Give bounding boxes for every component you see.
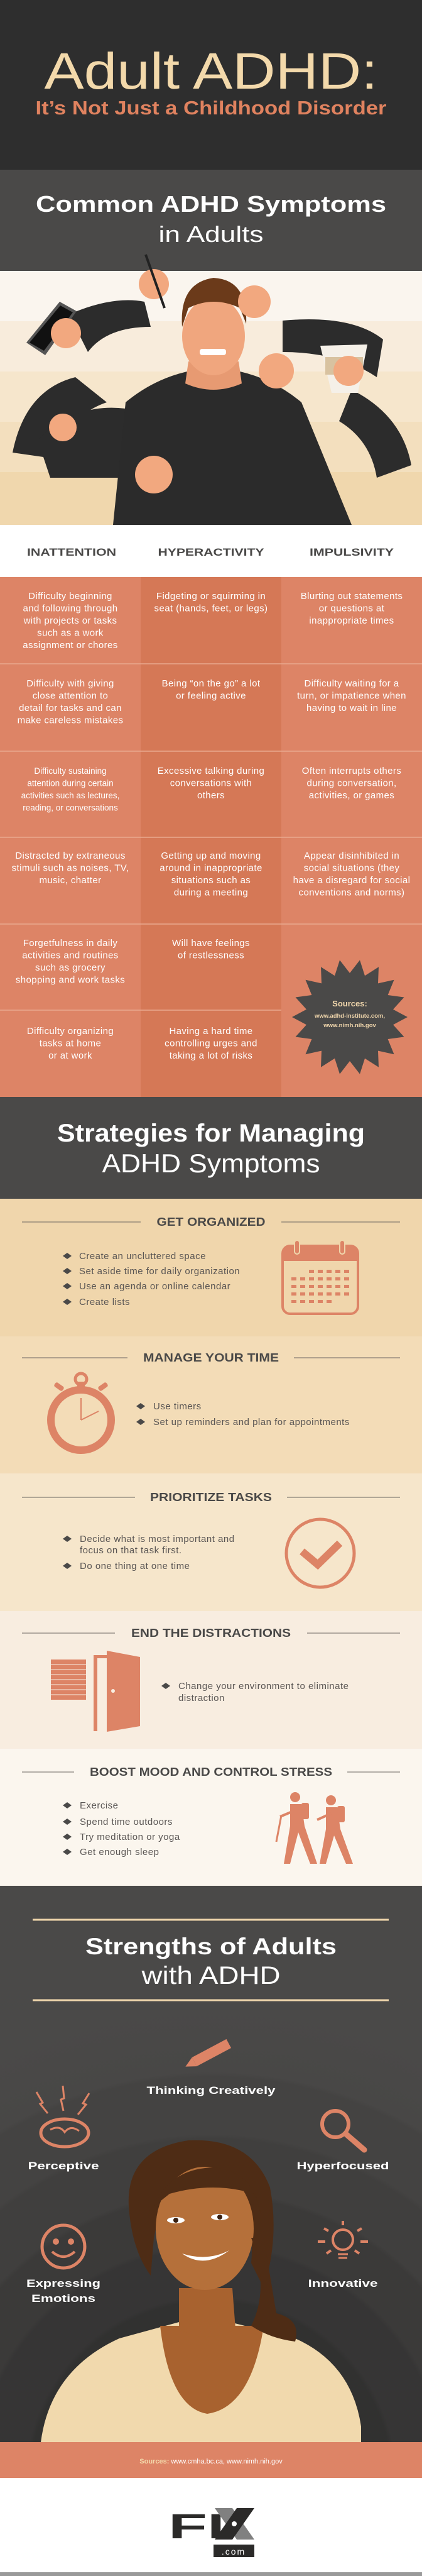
heading: strengths: Strengths of Adults <box>85 1934 337 1959</box>
panel: end the distractions <box>0 1611 422 1749</box>
panel: strengths of adults with ADHD <box>0 1886 422 2442</box>
panel: end the distractions: distraction <box>178 1693 225 1704</box>
symptoms table: social situations (they <box>304 862 399 874</box>
symptoms table: Excessive talking during <box>158 766 264 776</box>
hands <box>139 269 169 299</box>
row 5: such as grocery <box>35 962 106 973</box>
strength: thinking creatively <box>147 2039 276 2096</box>
row 1: Difficulty beginning <box>28 591 112 602</box>
symptoms table: Having a hard time <box>169 1026 253 1037</box>
symptoms table: seat (hands, feet, or legs) <box>154 603 268 614</box>
column headers: INATTENTION <box>27 546 116 558</box>
icon: open door <box>94 1651 140 1732</box>
sources starburst: www.nimh.nih.gov <box>323 1022 376 1029</box>
panel: prioritize tasks: Do one thing at one time <box>80 1561 190 1571</box>
panel: strengths of adults with ADHD: with ADHD <box>141 1962 280 1990</box>
heading: Common ADHD Symptoms in Adults <box>0 170 422 271</box>
row 3: reading, or conversations <box>23 803 118 812</box>
heading: Strategies for Managing ADHD Symptoms: ADHD Symptoms <box>102 1148 320 1178</box>
panel: boost mood and control stress: Get enough sleep <box>80 1847 159 1858</box>
symptoms table: Fidgeting or squirming in <box>156 591 266 602</box>
symptoms table: conventions and norms) <box>299 888 404 898</box>
strength: thinking creatively: Thinking Creatively <box>147 2084 276 2096</box>
heading: Strategies for Managing ADHD Symptoms <box>0 1097 422 1199</box>
row 3: activities such as lectures, <box>21 791 119 800</box>
symptoms table: Appear disinhibited in <box>304 850 399 861</box>
panel: boost mood and control stress: Exercise <box>80 1800 119 1811</box>
row 4: Distracted by extraneous <box>15 850 126 861</box>
icon: hikers <box>276 1792 353 1864</box>
symptoms table: having to wait in line <box>306 703 397 713</box>
symptoms table: Difficulty waiting for a <box>304 678 399 689</box>
title panel <box>0 0 422 170</box>
sources bar <box>0 2442 422 2478</box>
head <box>182 297 245 375</box>
panel: prioritize tasks: PRIORITIZE TASKS <box>150 1491 272 1504</box>
symptoms table: Will have feelings <box>172 938 250 949</box>
illustration: stressed man with many arms <box>0 255 422 525</box>
icon: window blinds <box>51 1660 86 1700</box>
row 5: shopping and work tasks <box>16 974 125 986</box>
heading: Common ADHD Symptoms in Adults: Common ADHD Symptoms <box>36 191 386 217</box>
symptoms table: during a meeting <box>174 888 248 898</box>
symptoms table: inappropriate times <box>309 615 394 626</box>
symptoms table: taking a lot of risks <box>170 1050 252 1061</box>
symptoms table: situations such as <box>171 875 251 886</box>
row 4: music, chatter <box>40 875 101 886</box>
panel: manage your time: Use timers <box>153 1401 202 1412</box>
row 2: Difficulty with giving <box>26 678 114 689</box>
panel: boost mood and control stress: BOOST MOOD AND CONTROL STRESS <box>90 1766 332 1778</box>
row 4: stimuli such as noises, TV, <box>12 862 129 874</box>
symptoms table: of restlessness <box>178 950 244 960</box>
panel: get organized <box>0 1199 422 1336</box>
strength: expressing emotions: Emotions <box>31 2293 95 2304</box>
symptoms table: during conversation, <box>306 778 397 788</box>
panel: prioritize tasks: focus on that task first. <box>80 1545 182 1556</box>
symptoms table: or questions at <box>319 603 385 614</box>
heading: Strategies for Managing ADHD Symptoms: Strategies for Managing <box>57 1120 365 1147</box>
torso <box>113 368 352 525</box>
symptoms table: controlling urges and <box>165 1038 257 1049</box>
panel: get organized: Set aside time for daily organization <box>79 1266 240 1277</box>
row 3: attention during certain <box>27 778 114 788</box>
symptoms table: turn, or impatience when <box>297 690 406 702</box>
icon: check circle <box>286 1519 354 1587</box>
strength: innovative <box>308 2221 378 2289</box>
row 5: activities and routines <box>22 950 119 960</box>
subtitle: It’s Not Just a Childhood Disorder <box>35 97 387 119</box>
symptoms table: Getting up and moving <box>161 850 261 861</box>
strength: hyperfocused: Hyperfocused <box>296 2160 389 2172</box>
panel: manage your time: Set up reminders and plan for appointments <box>153 1417 350 1428</box>
sources starburst: Sources: <box>332 999 367 1008</box>
symptoms table: Blurting out statements <box>301 591 403 602</box>
row 2: make careless mistakes <box>18 715 123 725</box>
row 1: and following through <box>23 603 118 614</box>
strength: expressing emotions: Expressing <box>26 2277 100 2289</box>
title: Adult ADHD: Adult ADHD: <box>44 43 378 100</box>
row 6: Difficulty organizing <box>27 1026 114 1037</box>
symptoms table: have a disregard for social <box>293 875 410 886</box>
strength: expressing emotions <box>26 2225 100 2304</box>
sources bar: Sources: www.cmha.bc.ca, www.nimh.nih.gov <box>139 2458 283 2465</box>
panel: prioritize tasks <box>0 1473 422 1611</box>
column headers: IMPULSIVITY <box>310 546 394 558</box>
icon: calendar <box>283 1240 358 1314</box>
row 6: or at work <box>48 1050 92 1061</box>
symptoms table: Often interrupts others <box>302 766 401 776</box>
strength: perceptive: Perceptive <box>28 2160 99 2172</box>
symptoms table: conversations with <box>170 778 252 788</box>
panel: boost mood and control stress <box>0 1749 422 1886</box>
strength: innovative: Innovative <box>308 2277 378 2289</box>
strength: hyperfocused <box>296 2111 389 2172</box>
column headers <box>0 525 422 577</box>
logo: FIX.com: FI <box>168 2506 225 2546</box>
illustration: smiling woman <box>41 2140 361 2442</box>
column headers: HYPERACTIVITY <box>158 546 264 558</box>
panel: get organized: Use an agenda or online calendar <box>79 1281 230 1292</box>
row 2: detail for tasks and can <box>19 703 122 713</box>
symptoms table <box>0 577 422 1097</box>
sources starburst <box>292 960 408 1074</box>
logo: FIX.com: .com <box>222 2546 246 2557</box>
heading: Common ADHD Symptoms in Adults: in Adults <box>158 221 264 247</box>
panel: manage your time <box>0 1336 422 1473</box>
panel: boost mood and control stress: Try meditation or yoga <box>80 1832 180 1842</box>
row 6: tasks at home <box>40 1038 101 1049</box>
row 5: Forgetfulness in daily <box>23 938 117 949</box>
logo: FIX.com <box>168 2506 254 2557</box>
panel: boost mood and control stress: Spend time outdoors <box>80 1817 173 1827</box>
panel: get organized: Create lists <box>79 1297 130 1307</box>
row 1: such as a work <box>37 627 104 639</box>
icon: stopwatch <box>51 1373 111 1450</box>
panel: get organized: Create an uncluttered space <box>79 1251 206 1262</box>
symptoms table: around in inappropriate <box>160 862 262 874</box>
arms <box>13 377 107 459</box>
sources starburst: www.adhd-institute.com, <box>314 1013 385 1020</box>
symptoms table: others <box>197 790 225 801</box>
neck <box>185 361 242 390</box>
symptoms table: activities, or games <box>309 790 394 801</box>
panel: end the distractions: Change your environment to eliminate <box>178 1681 349 1692</box>
row 1: with projects or tasks <box>23 615 117 626</box>
strength: perceptive <box>28 2086 99 2172</box>
symptoms table: Being “on the go” a lot <box>162 678 261 689</box>
row 1: assignment or chores <box>23 640 118 651</box>
row 3: Difficulty sustaining <box>34 766 107 776</box>
panel: manage your time: MANAGE YOUR TIME <box>143 1351 279 1364</box>
symptoms table: or feeling active <box>176 690 246 702</box>
panel: get organized: GET ORGANIZED <box>157 1216 265 1228</box>
panel: prioritize tasks: Decide what is most important and <box>80 1534 235 1544</box>
panel: end the distractions: END THE DISTRACTIONS <box>131 1627 291 1639</box>
row 2: close attention to <box>33 690 108 702</box>
